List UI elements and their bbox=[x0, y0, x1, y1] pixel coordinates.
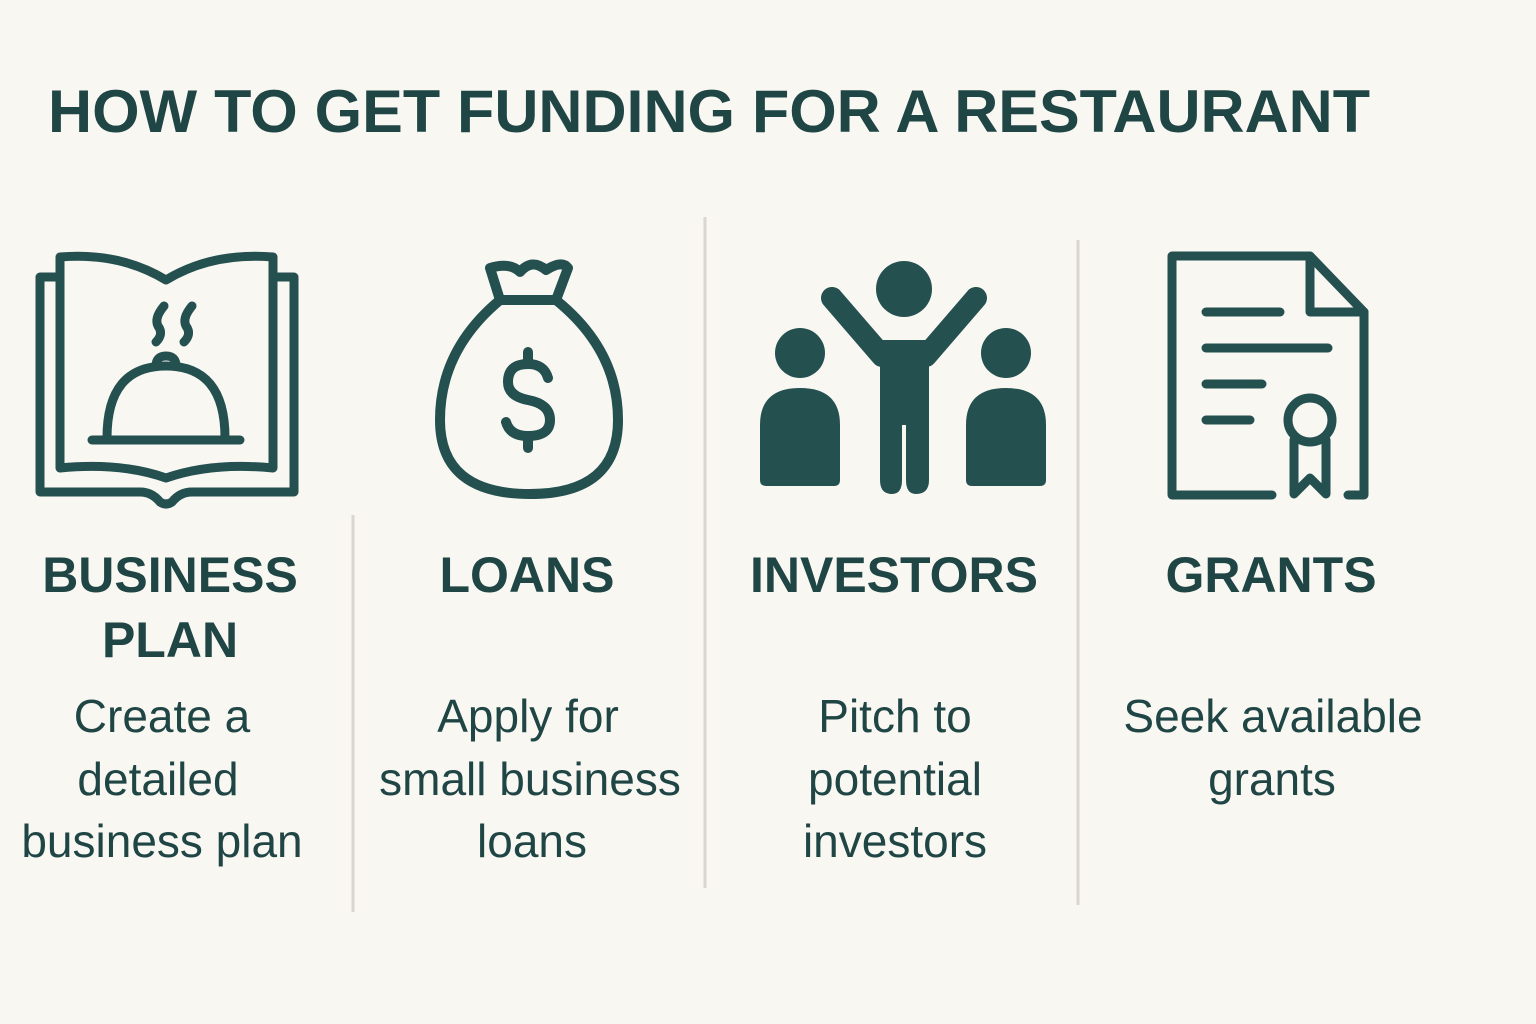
descriptions: detailed bbox=[77, 753, 239, 805]
headings: GRANTS bbox=[1165, 547, 1377, 603]
descriptions: business plan bbox=[21, 815, 303, 867]
descriptions: potential bbox=[808, 753, 982, 805]
title: HOW TO GET FUNDING FOR A RESTAURANT bbox=[48, 78, 1370, 145]
headings: BUSINESS bbox=[42, 547, 298, 603]
icon: money bag bbox=[440, 264, 618, 494]
headings: INVESTORS bbox=[750, 547, 1038, 603]
descriptions: investors bbox=[803, 815, 987, 867]
descriptions: Pitch to bbox=[818, 690, 972, 742]
icon: grant document bbox=[1172, 256, 1364, 495]
icon: investors bbox=[760, 261, 1046, 494]
icon: book with cloche bbox=[40, 256, 294, 504]
descriptions: grants bbox=[1208, 753, 1336, 805]
descriptions: loans bbox=[477, 815, 587, 867]
descriptions: Seek available bbox=[1123, 690, 1423, 742]
descriptions: small business bbox=[379, 753, 681, 805]
headings: LOANS bbox=[440, 547, 614, 603]
headings: PLAN bbox=[102, 612, 238, 668]
headings bbox=[42, 547, 1377, 668]
descriptions: Apply for bbox=[437, 690, 619, 742]
descriptions: Create a bbox=[74, 690, 251, 742]
descriptions bbox=[21, 690, 1423, 867]
